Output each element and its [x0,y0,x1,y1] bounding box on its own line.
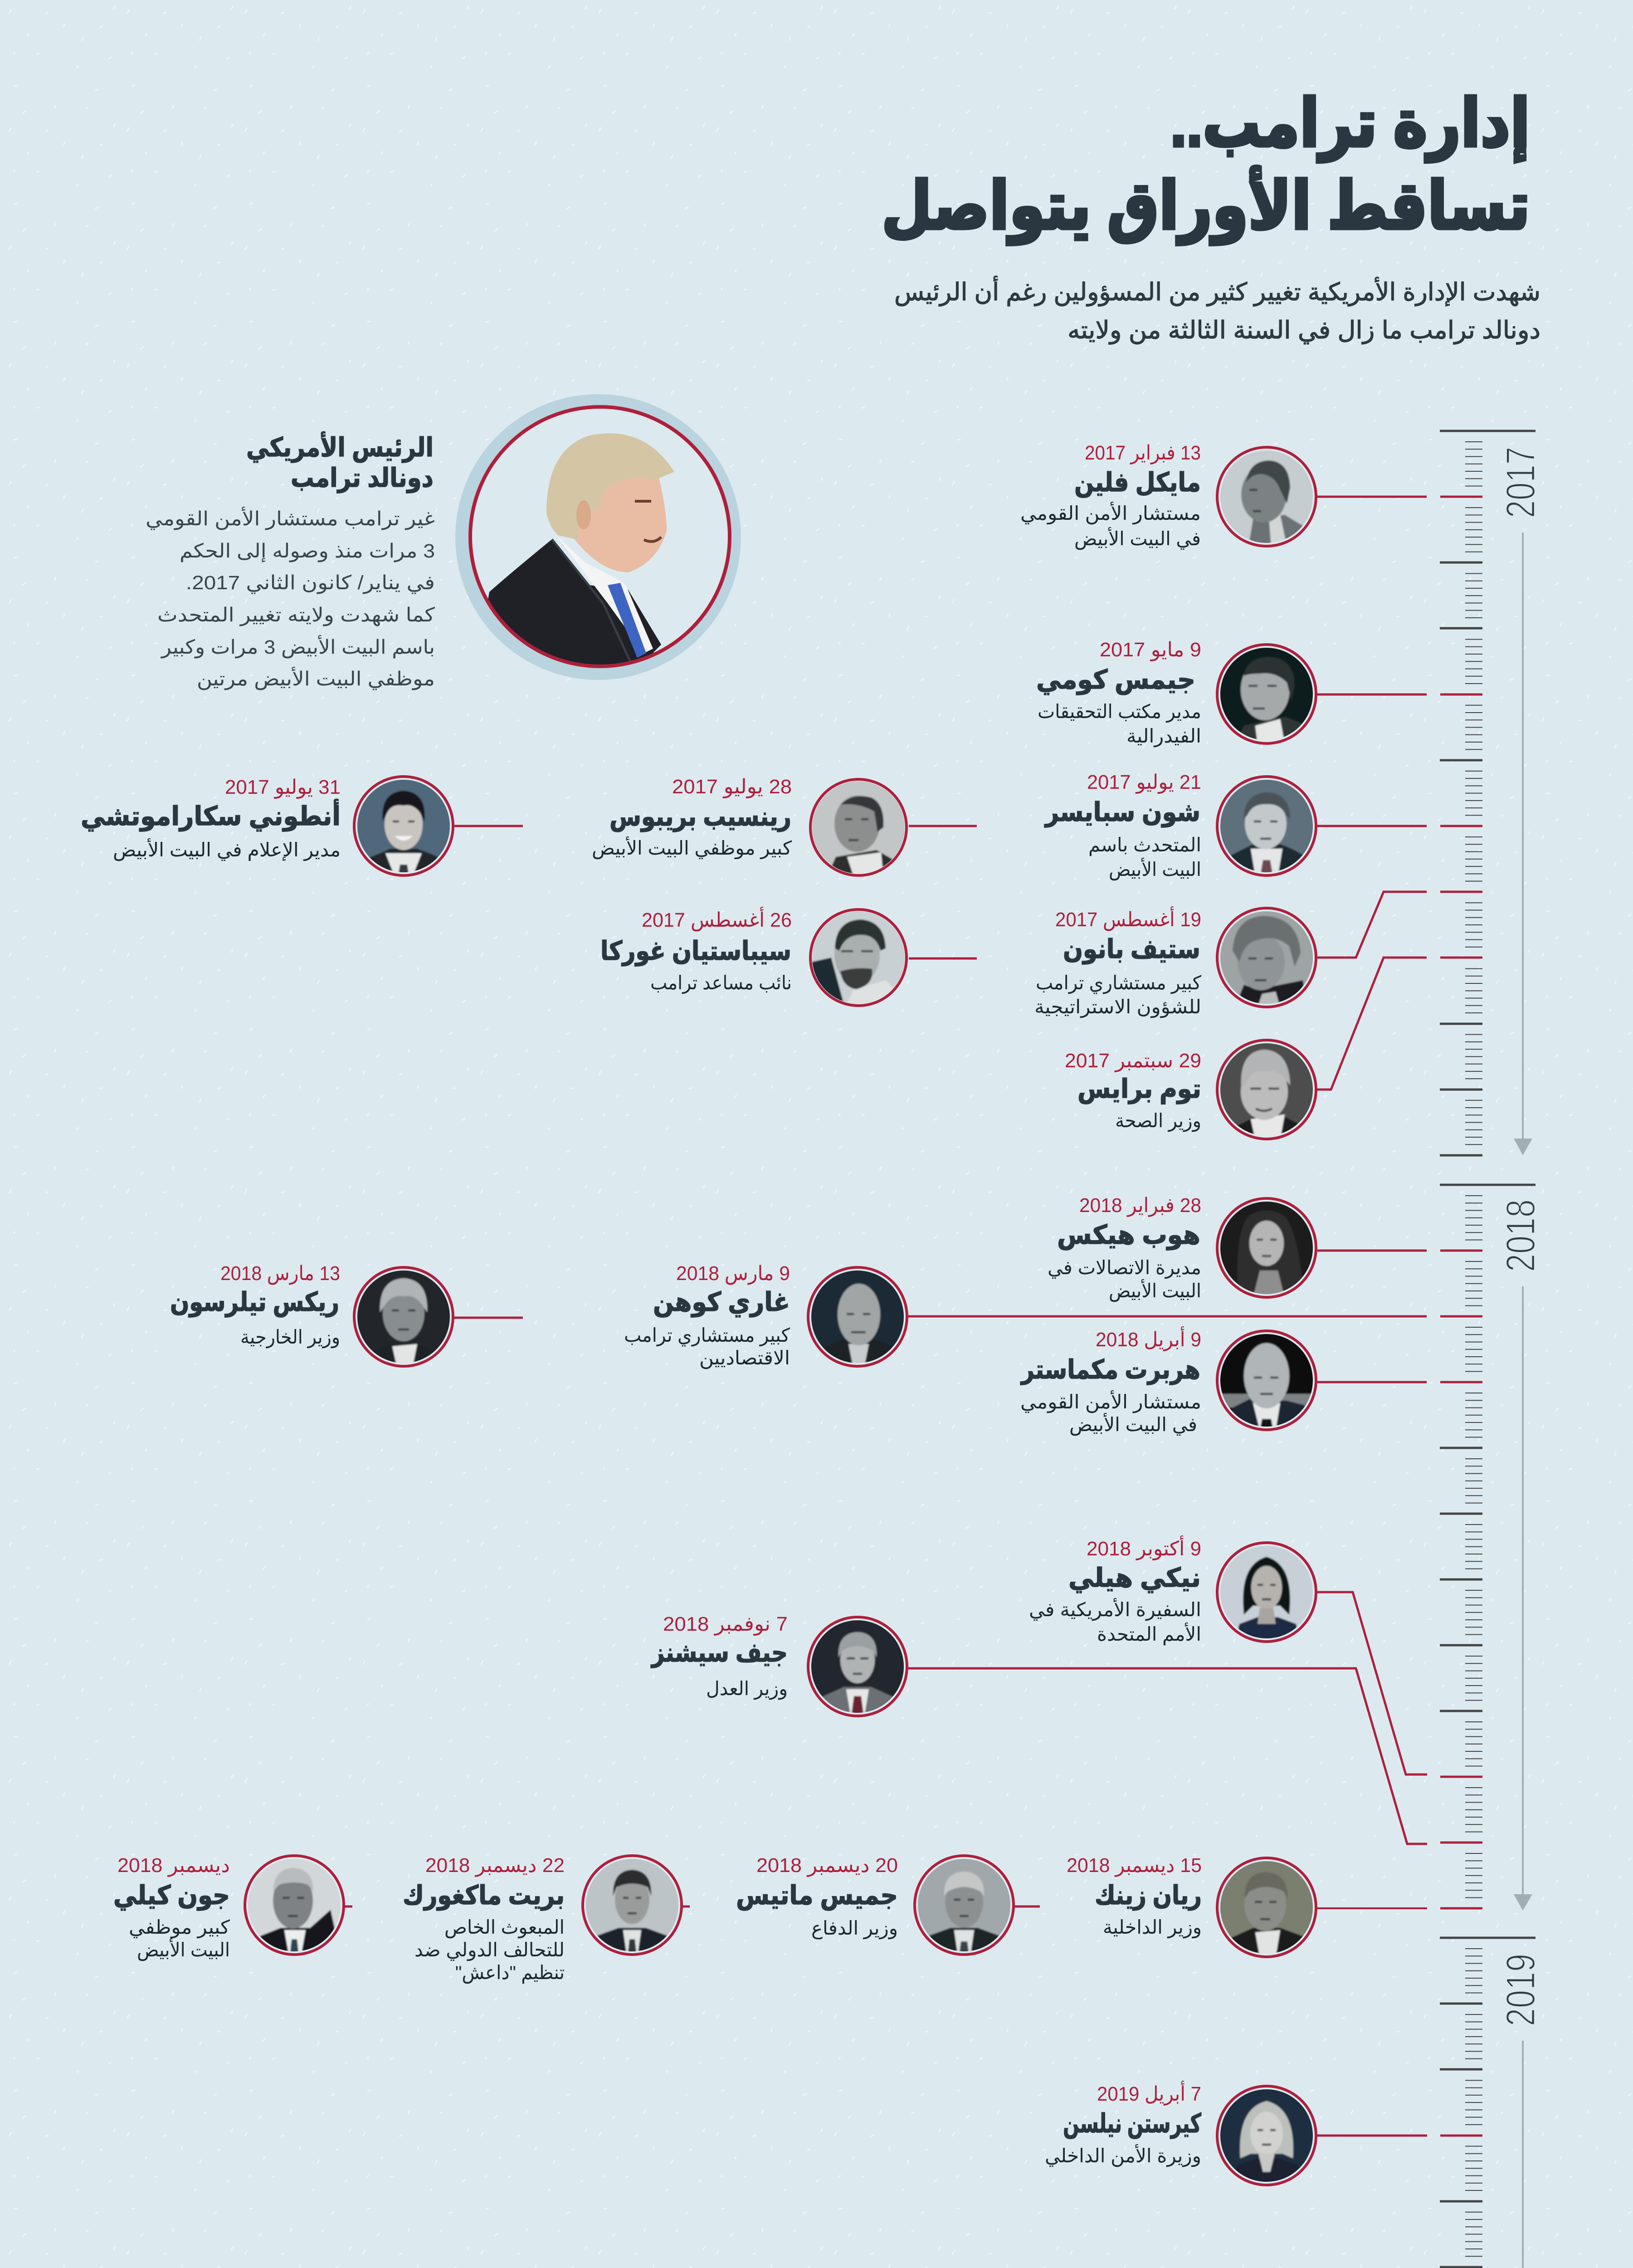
text: Tillerson: وزير الخارجية [240,1326,340,1348]
subtitle text: دونالد ترامب ما زال في السنة الثالثة من ولايته [1068,317,1540,344]
text: McGurk: تنظيم "داعش" [455,1962,565,1984]
entry: Steve Bannon [1034,906,1316,1018]
text: Scaramucci: 31 يوليو 2017 [225,776,341,799]
Trump heading [246,431,434,494]
text: Haley: 9 أكتوبر 2018 [1087,1535,1201,1560]
text: Cohn: غاري كوهن [653,1287,790,1318]
arrow 2018 [1514,1286,1532,1911]
portrait: Haley [1217,1542,1316,1642]
text: Priebus: 28 يوليو 2017 [672,776,792,798]
connector: Sessions [908,1668,1427,1844]
portrait: Gorka [809,908,908,1007]
entry: Brett McGurk [403,1854,682,1984]
text: Haley: السفيرة الأمريكية في [1029,1598,1201,1621]
text: Mattis [736,1854,898,1939]
text: Kelly: كبير موظفي [129,1916,230,1939]
text: Mattis: جميس ماتيس [736,1881,898,1911]
portrait: Tillerson [354,1267,453,1367]
text: Flynn: مستشار الأمن القومي [1020,501,1201,525]
text: Mattis: 20 ديسمبر 2018 [756,1854,898,1877]
connector: Spicer [1317,825,1427,827]
text: Bannon: للشؤون الاستراتيجية [1034,996,1201,1018]
text: Tillerson: 13 مارس 2018 [220,1262,340,1285]
entry: Tom Price [1065,1040,1316,1139]
portrait: Price [1217,1040,1316,1139]
text: Flynn: مايكل فلين [1074,468,1201,498]
year label 2019: 2019 [1498,1954,1544,2026]
text: Scaramucci [81,776,341,861]
entry: Ryan Zinke [1067,1854,1316,1957]
portrait: McGurk [582,1855,682,1955]
text: McMaster: في البيت الأبيض [1069,1413,1197,1436]
entry: H. R. McMaster [1020,1326,1316,1436]
text: Price: وزير الصحة [1115,1110,1201,1132]
text: Nielsen: 7 أبريل 2019 [1097,2081,1201,2106]
Trump description: 3 مرات منذ وصوله إلى الحكم [180,540,435,562]
portrait: Hicks [1217,1198,1316,1298]
entry: Rex Tillerson [170,1262,453,1367]
portrait: Flynn [1217,447,1316,547]
Trump heading: دونالد ترامب [291,463,434,494]
connector: Tillerson [454,1316,523,1319]
entry: Sean Spicer [1044,771,1316,880]
entry: Gary Cohn [624,1262,907,1369]
portrait: Bannon [1217,908,1316,1007]
text: Spicer: شون سبايسر [1044,797,1200,828]
text: McGurk: 22 ديسمبر 2018 [425,1854,565,1877]
subtitle text [894,276,1540,344]
connector: Flynn [1317,495,1427,498]
text: Zinke [1067,1854,1202,1938]
connector: Zinke [1317,1907,1427,1909]
entry: Sebastian Gorka [600,907,908,1007]
portrait: Sessions [808,1617,907,1716]
text: Comey: الفيدرالية [1126,725,1201,747]
timeline ruler [1440,431,1536,2268]
connector: Price [1317,958,1427,1090]
text: Zinke: ريان زينك [1095,1881,1202,1911]
text: Comey [1036,639,1201,747]
year label 2017: 2017 [1498,447,1544,518]
connector: Bannon [1317,892,1427,958]
connector: Hicks [1317,1249,1427,1252]
connector: Mattis [1014,1905,1040,1908]
connector: Haley [1317,1592,1427,1774]
connector: Nielsen [1317,2135,1427,2136]
text: Haley: الأمم المتحدة [1097,1622,1201,1646]
text: Price: توم برايس [1077,1074,1201,1105]
Trump heading: الرئيس الأمريكي [246,431,434,463]
text: Sessions [650,1613,788,1700]
Trump description: باسم البيت الأبيض 3 مرات وكبير [161,635,435,659]
text: Cohn [624,1262,790,1369]
text: Hicks: البيت الأبيض [1109,1279,1201,1302]
entry: Kirstjen Nielsen [1045,2081,1316,2185]
portrait: Nielsen [1217,2086,1316,2185]
text: Gorka: سيباستيان غوركا [600,936,791,967]
Trump description [146,506,435,690]
text: Bannon [1034,906,1201,1018]
connector: Priebus [909,825,977,827]
panel: Trump [146,394,741,690]
text: McMaster [1020,1326,1201,1436]
text: Hicks: مديرة الاتصالات في [1048,1257,1201,1279]
portrait: Zinke [1217,1857,1316,1957]
title: تساقط الأوراق يتواصل [882,166,1530,245]
text: Cohn: كبير مستشاري ترامب [624,1325,790,1346]
text: Scaramucci: مدير الإعلام في البيت الأبيض [113,838,341,861]
text: Cohn: الاقتصاديين [699,1347,790,1369]
text: Kelly: ديسمبر 2018 [117,1854,230,1877]
text: Scaramucci: أنطوني سكاراموتشي [81,799,341,832]
portrait: Spicer [1217,776,1316,876]
connector: McMaster [1317,1381,1427,1383]
text: Spicer: 21 يوليو 2017 [1087,771,1201,794]
text: Kelly: البيت الأبيض [137,1938,230,1961]
portrait: Mattis [914,1855,1014,1955]
Trump description: كما شهدت ولايته تغيير المتحدث [157,604,435,626]
connector: Gorka [909,957,977,960]
entry: Michael Flynn [1020,442,1316,550]
text: Gorka: نائب مساعد ترامب [650,972,792,994]
text: Bannon: ستيف بانون [1063,934,1200,965]
text: McGurk: المبعوث الخاص [444,1916,565,1938]
connector: Cohn [908,1315,1427,1317]
connector: Scaramucci [454,825,523,827]
entry: James Mattis [736,1854,1014,1955]
text: Bannon: كبير مستشاري ترامب [1036,972,1201,994]
entry: Hope Hicks [1048,1194,1316,1302]
subtitle text: شهدت الإدارة الأمريكية تغيير كثير من المسؤولين رغم أن الرئيس [894,276,1540,306]
text: Haley: نيكي هيلي [1068,1563,1201,1593]
text: Kelly [113,1854,230,1961]
text: Hicks [1048,1194,1201,1302]
text: Cohn: 9 مارس 2018 [676,1262,790,1285]
text: Price [1065,1050,1201,1132]
text: Comey: 9 مايو 2017 [1100,639,1201,661]
text: Spicer: المتحدث باسم [1088,834,1201,856]
text: Kelly: جون كيلي [113,1881,230,1911]
text: McGurk [403,1854,565,1984]
portrait: Cohn [808,1267,907,1367]
arrow 2019 [1513,2041,1532,2268]
Trump description: غير ترامب مستشار الأمن القومي [146,506,435,530]
entry: John Kelly [113,1854,344,1961]
entry: Reince Priebus [592,776,908,877]
entry: Nikki Haley [1029,1535,1316,1646]
text: Sessions: جيف سيشنز [650,1638,788,1668]
text: Gorka [600,907,792,994]
text: Priebus [592,776,792,860]
text: Hicks: 28 فبراير 2018 [1079,1194,1201,1217]
text: Tillerson [170,1262,340,1348]
text: Nielsen: كيرستن نيلسن [1063,2109,1201,2139]
title: إدارة ترامب.. [1170,86,1530,162]
Trump portrait [455,394,741,680]
portrait: Scaramucci [354,776,453,876]
text: Comey: جيمس كومي [1036,665,1195,695]
text: Nielsen: وزيرة الأمن الداخلي [1045,2144,1201,2167]
connector: Kelly [344,1905,352,1908]
arrow 2017 [1514,533,1532,1155]
text: Spicer [1044,771,1201,880]
text: Flynn: في البيت الأبيض [1074,527,1201,550]
entry: Jeff Sessions [650,1613,907,1716]
portrait: Priebus [809,777,908,877]
text: McMaster: هربرت مكماستر [1020,1355,1200,1385]
text: Flynn [1020,442,1201,550]
text: Comey: مدير مكتب التحقيقات [1038,701,1201,723]
portrait: Kelly [244,1855,344,1955]
text: Zinke: وزير الداخلية [1103,1916,1202,1938]
year label 2018: 2018 [1498,1199,1544,1272]
text: McMaster: 9 أبريل 2018 [1096,1326,1201,1351]
text: Zinke: 15 ديسمبر 2018 [1067,1854,1202,1877]
title [882,86,1530,245]
text: Spicer: البيت الأبيض [1109,857,1201,880]
connector: Comey [1317,693,1427,696]
text: Gorka: 26 أغسطس 2017 [642,907,792,932]
portrait: McMaster [1217,1330,1316,1430]
text: Priebus: كبير موظفي البيت الأبيض [592,836,792,860]
Trump description: موظفي البيت الأبيض مرتين [197,666,435,690]
Trump description: في يناير/ كانون الثاني 2017. [186,572,435,594]
entry: James Comey [1036,639,1316,747]
entry: Anthony Scaramucci [81,776,453,876]
text: McGurk: بريت ماكغورك [403,1881,565,1911]
text: Hicks: هوب هيكس [1057,1220,1200,1251]
text: Sessions: وزير العدل [706,1678,788,1700]
portrait: Comey [1217,644,1316,744]
text: Priebus: رينسيب بريبوس [609,802,791,832]
text: Mattis: وزير الدفاع [811,1917,898,1939]
text: Nielsen [1045,2081,1201,2167]
text: Sessions: 7 نوفمبر 2018 [663,1613,788,1636]
text: Price: 29 سبتمبر 2017 [1065,1050,1201,1072]
text: Tillerson: ريكس تيلرسون [170,1287,339,1318]
text: McGurk: للتحالف الدولي ضد [414,1939,565,1961]
text: Haley [1029,1535,1201,1646]
text: Flynn: 13 فبراير 2017 [1085,442,1201,464]
text: Bannon: 19 أغسطس 2017 [1055,906,1201,931]
text: McMaster: مستشار الأمن القومي [1020,1390,1201,1413]
connector: McGurk [682,1905,690,1908]
